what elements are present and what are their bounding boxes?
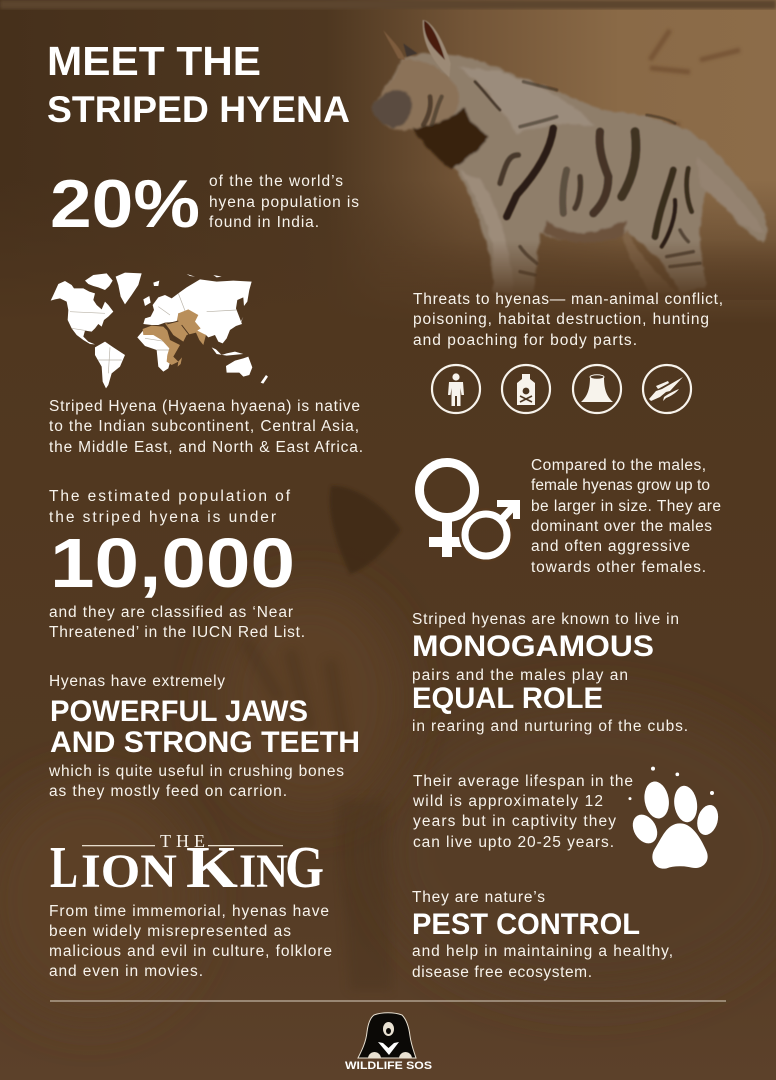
title: STRIPED HYENA [47, 89, 350, 130]
lion king logo [50, 831, 324, 900]
title: MEET THE [47, 38, 261, 84]
fade under hyena [380, 240, 776, 300]
hyena photo [372, 20, 767, 293]
misrepresentation text: and even in movies. [49, 963, 203, 980]
pest control text [412, 889, 673, 981]
stat: 20 percent: found in India. [209, 214, 319, 231]
threat icons [432, 365, 691, 413]
monogamy text: EQUAL ROLE [412, 682, 603, 715]
population stat: 10,000 [50, 524, 295, 602]
monogamy text [412, 611, 688, 735]
stat: 20 percent: hyena population is [209, 194, 359, 211]
monogamy text: pairs and the males play an [412, 667, 628, 684]
native range text [49, 398, 363, 456]
lifespan text: Their average lifespan in the [413, 773, 633, 790]
pest control text: PEST CONTROL [412, 908, 640, 941]
lion king logo: ION [81, 845, 177, 898]
title [47, 38, 350, 130]
gender symbols [420, 462, 520, 560]
threats text: poisoning, habitat destruction, hunting [413, 311, 709, 328]
lifespan text: years but in captivity they [413, 813, 616, 830]
monogamy text: MONOGAMOUS [412, 630, 654, 663]
monogamy text: in rearing and nurturing of the cubs. [412, 718, 688, 735]
icon: poison bottle [502, 365, 550, 413]
female dominance text: dominant over the males [531, 518, 712, 535]
lifespan text: can live upto 20-25 years. [413, 834, 614, 851]
icon: tree stump [573, 365, 621, 413]
map borders [70, 293, 237, 373]
population stat: the striped hyena is under [49, 509, 276, 526]
faded second hyena in background [215, 486, 405, 990]
female dominance text: female hyenas grow up to [531, 477, 710, 494]
threats text: Threats to hyenas— man-animal conflict, [413, 291, 723, 308]
population stat: and they are classified as ‘Near [49, 604, 293, 621]
monogamy text: Striped hyenas are known to live in [412, 611, 679, 628]
stat: 20 percent: of the the world’s [209, 173, 343, 190]
wildlife sos logo: WILDLIFE SOS [345, 1060, 432, 1072]
hyena stripes [423, 82, 700, 275]
female dominance text: Compared to the males, [531, 457, 706, 474]
threats text [413, 291, 723, 349]
misrepresentation text [49, 903, 332, 980]
icon: man [432, 365, 480, 413]
female dominance text: towards other females. [531, 559, 706, 576]
threats text: and poaching for body parts. [413, 332, 637, 349]
lifespan text [412, 773, 633, 851]
jaws text: which is quite useful in crushing bones [48, 763, 344, 780]
population stat: The estimated population of [49, 488, 291, 505]
misrepresentation text: been widely misrepresented as [49, 923, 291, 940]
population stat [49, 488, 305, 641]
stat: 20 percent: 20% [50, 166, 200, 242]
icon: rifle and knife [643, 365, 691, 413]
lion king logo: IN [239, 845, 288, 898]
native range text: Striped Hyena (Hyaena hyaena) is native [49, 398, 360, 415]
icon: paw print [628, 767, 721, 869]
icon: sloth bear [358, 1013, 416, 1058]
pest control text: and help in maintaining a healthy, [412, 943, 673, 960]
lion king logo: K [186, 834, 238, 900]
female dominance text [531, 457, 721, 576]
female dominance text: and often aggressive [531, 538, 690, 555]
jaws text [48, 673, 360, 800]
world map with hyena range [51, 273, 268, 388]
jaws text: as they mostly feed on carrion. [49, 783, 287, 800]
wildlife sos logo [345, 1013, 432, 1072]
jaws text: Hyenas have extremely [49, 673, 225, 690]
population stat: Threatened’ in the IUCN Red List. [49, 624, 305, 641]
hyena range in tan [143, 326, 180, 365]
lion king logo: G [285, 834, 324, 900]
hyena ears [383, 20, 451, 77]
female dominance text: be larger in size. They are [531, 498, 721, 515]
misrepresentation text: From time immemorial, hyenas have [49, 903, 329, 920]
jaws text: AND STRONG TEETH [50, 726, 360, 759]
native range text: to the Indian subcontinent, Central Asia, [49, 418, 359, 435]
hyena body [372, 54, 767, 293]
native range text: the Middle East, and North & East Africa. [49, 439, 363, 456]
pest control text: disease free ecosystem. [412, 964, 592, 981]
pest control text: They are nature’s [412, 889, 545, 906]
lifespan text: wild is approximately 12 [412, 793, 603, 810]
divider [50, 1000, 726, 1002]
misrepresentation text: malicious and evil in culture, folklore [49, 943, 332, 960]
jaws text: POWERFUL JAWS [50, 695, 308, 728]
lion king logo: THE [160, 831, 205, 851]
stat: 20 percent [50, 166, 359, 242]
lion king logo: L [50, 834, 78, 900]
